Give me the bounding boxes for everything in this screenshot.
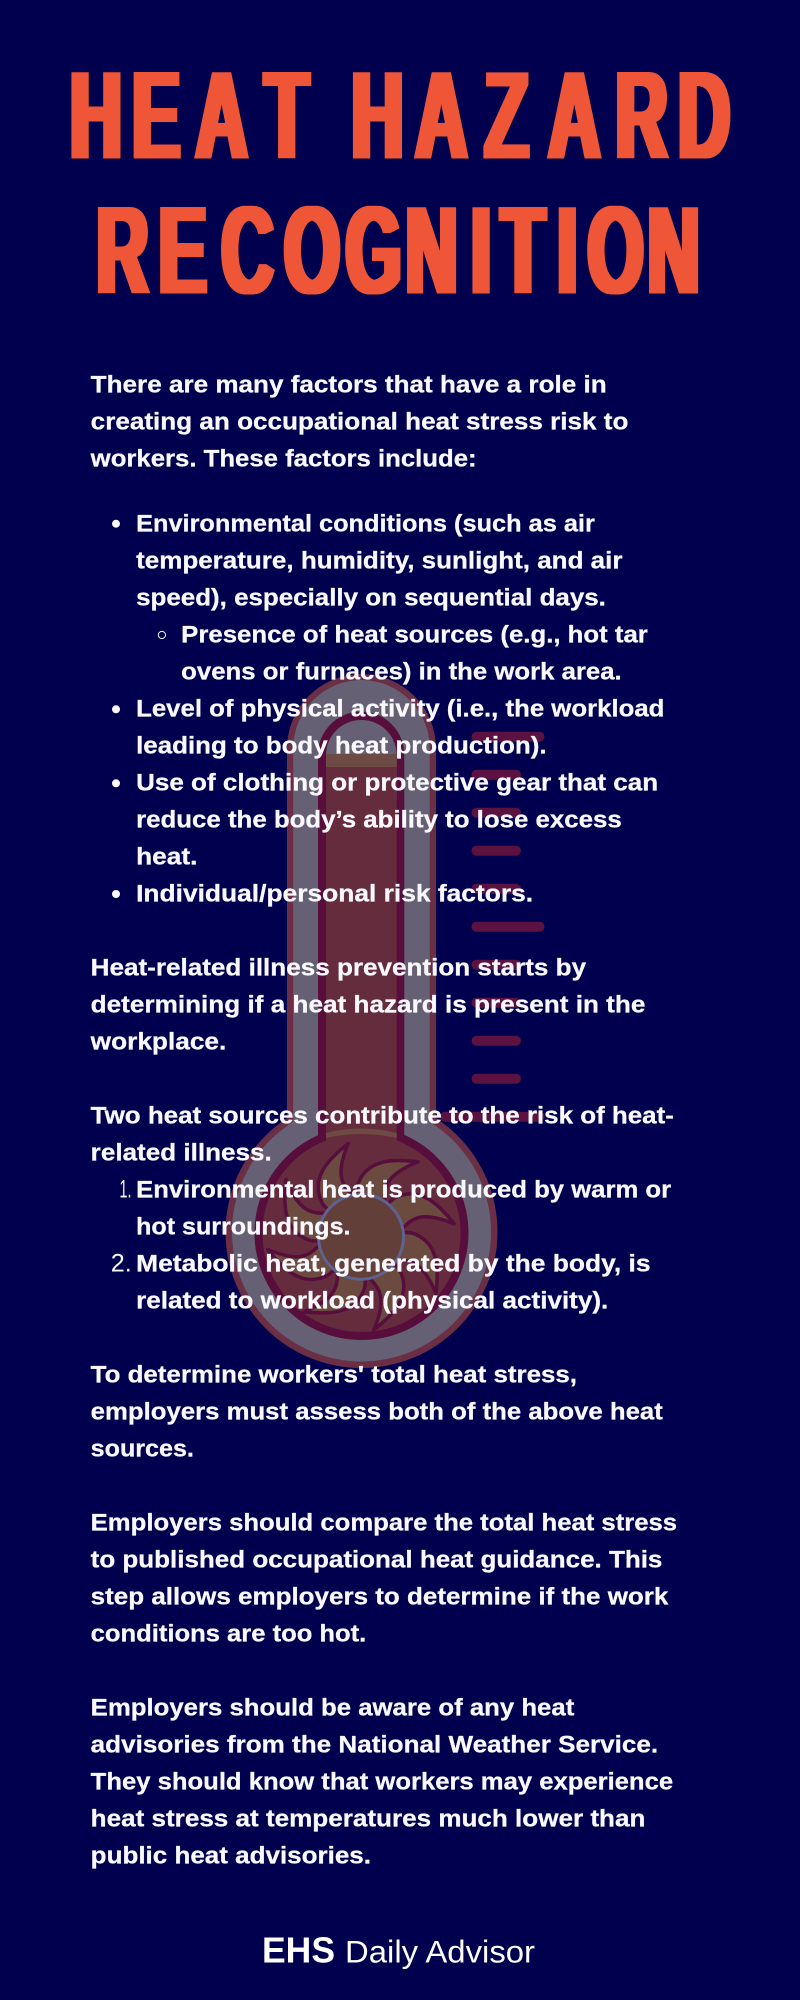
bullet 3 text <box>136 769 658 870</box>
paragraph: heat advisories: They should know that workers may experience <box>91 1768 673 1795</box>
paragraph: total heat stress: employers must assess both of the above heat <box>91 1398 663 1425</box>
item 2: Metabolic heat, generated by the body, is <box>136 1250 651 1277</box>
paragraph: total heat stress <box>91 1361 663 1462</box>
thermometer outer border <box>287 674 436 1232</box>
paragraph: two heat sources: Two heat sources contribute to the risk of heat- <box>91 1102 674 1129</box>
bullet 1 text: speed), especially on sequential days. <box>136 584 606 611</box>
paragraph: total heat stress: To determine workers' total heat stress, <box>91 1361 577 1388</box>
paragraph: heat advisories: advisories from the National Weather Service. <box>91 1731 658 1758</box>
thermometer glass <box>293 680 430 1232</box>
bullet 3 <box>112 779 120 787</box>
numbered list of heat sources <box>111 1175 672 1314</box>
title: RECOGNITION <box>97 179 699 321</box>
bullet 2 text <box>136 695 664 759</box>
paragraph: total heat stress: sources. <box>91 1435 194 1462</box>
paragraph: compare to guidance: step allows employers to determine if the work <box>91 1583 669 1610</box>
item 2: related to workload (physical activity). <box>136 1287 608 1314</box>
item 2: 2. <box>111 1249 132 1277</box>
paragraph: heat advisories: Employers should be aware of any heat <box>91 1694 574 1721</box>
bullet 2 text: leading to body heat production). <box>136 732 547 759</box>
thermometer tube interior grey <box>326 720 397 800</box>
intro paragraph <box>90 372 628 472</box>
mercury highlight bands <box>326 754 397 1138</box>
title: HEAT HAZARD <box>70 44 730 186</box>
icon: sun in bulb <box>267 1143 455 1331</box>
bullet 1 text: temperature, humidity, sunlight, and air <box>136 548 623 574</box>
bullet 4 text: Individual/personal risk factors. <box>136 880 533 907</box>
paragraph: compare to guidance: Employers should compare the total heat stress <box>91 1509 677 1536</box>
intro paragraph: creating an occupational heat stress risk to <box>91 408 628 436</box>
paragraph: compare to guidance: conditions are too hot. <box>91 1620 366 1648</box>
thermometer inner outline <box>318 712 404 1233</box>
paragraph: compare to guidance <box>91 1509 677 1648</box>
bullet 1 <box>112 520 120 528</box>
bullet 1 text: Environmental conditions (such as air <box>136 511 595 538</box>
paragraph: heat advisories <box>91 1694 673 1869</box>
bulleted list of risk factors <box>112 511 664 907</box>
intro paragraph: workers. These factors include: <box>90 445 477 472</box>
footer logo: EHS Daily Advisor: EHS <box>262 1929 335 1970</box>
bullet 1 text <box>136 511 623 611</box>
paragraph: prevention <box>90 954 645 1055</box>
sub bullet text: Presence of heat sources (e.g., hot tar <box>181 622 648 648</box>
sub bullet <box>158 631 165 639</box>
footer logo: EHS Daily Advisor: Daily Advisor <box>345 1933 535 1969</box>
paragraph: heat advisories: heat stress at temperatures much lower than <box>91 1805 645 1832</box>
sub bullet text: ovens or furnaces) in the work area. <box>181 658 622 685</box>
paragraph: heat advisories: public heat advisories. <box>91 1842 371 1869</box>
item 1 <box>120 1175 672 1240</box>
item 1: Environmental heat is produced by warm or <box>136 1176 672 1203</box>
item 1: 1. <box>120 1175 132 1203</box>
paragraph: two heat sources: related illness. <box>91 1139 272 1166</box>
paragraph: two heat sources <box>91 1102 674 1166</box>
thermometer scale ticks <box>440 732 544 1122</box>
bullet 2 text: Level of physical activity (i.e., the workload <box>136 695 664 722</box>
sub bullet text <box>181 622 648 685</box>
paragraph: prevention: Heat-related illness prevention starts by <box>91 954 586 981</box>
bullet 3 text: Use of clothing or protective gear that can <box>136 769 658 796</box>
bullet 3 text: reduce the body’s ability to lose excess <box>136 806 622 833</box>
paragraph: prevention: determining if a heat hazard is present in the <box>91 991 645 1018</box>
bullet 4 <box>112 890 120 898</box>
intro paragraph: There are many factors that have a role in <box>91 372 607 399</box>
item 2 <box>111 1249 651 1314</box>
thermometer mercury column <box>326 754 397 1144</box>
bullet 3 text: heat. <box>136 843 197 870</box>
footer logo: EHS Daily Advisor <box>262 1929 535 1970</box>
bullet 2 <box>112 705 120 713</box>
icon: thermometer watermark <box>226 674 544 1368</box>
title <box>70 44 730 321</box>
paragraph: prevention: workplace. <box>90 1028 226 1055</box>
paragraph: compare to guidance: to published occupational heat guidance. This <box>91 1546 662 1573</box>
item 1: hot surroundings. <box>136 1213 350 1240</box>
